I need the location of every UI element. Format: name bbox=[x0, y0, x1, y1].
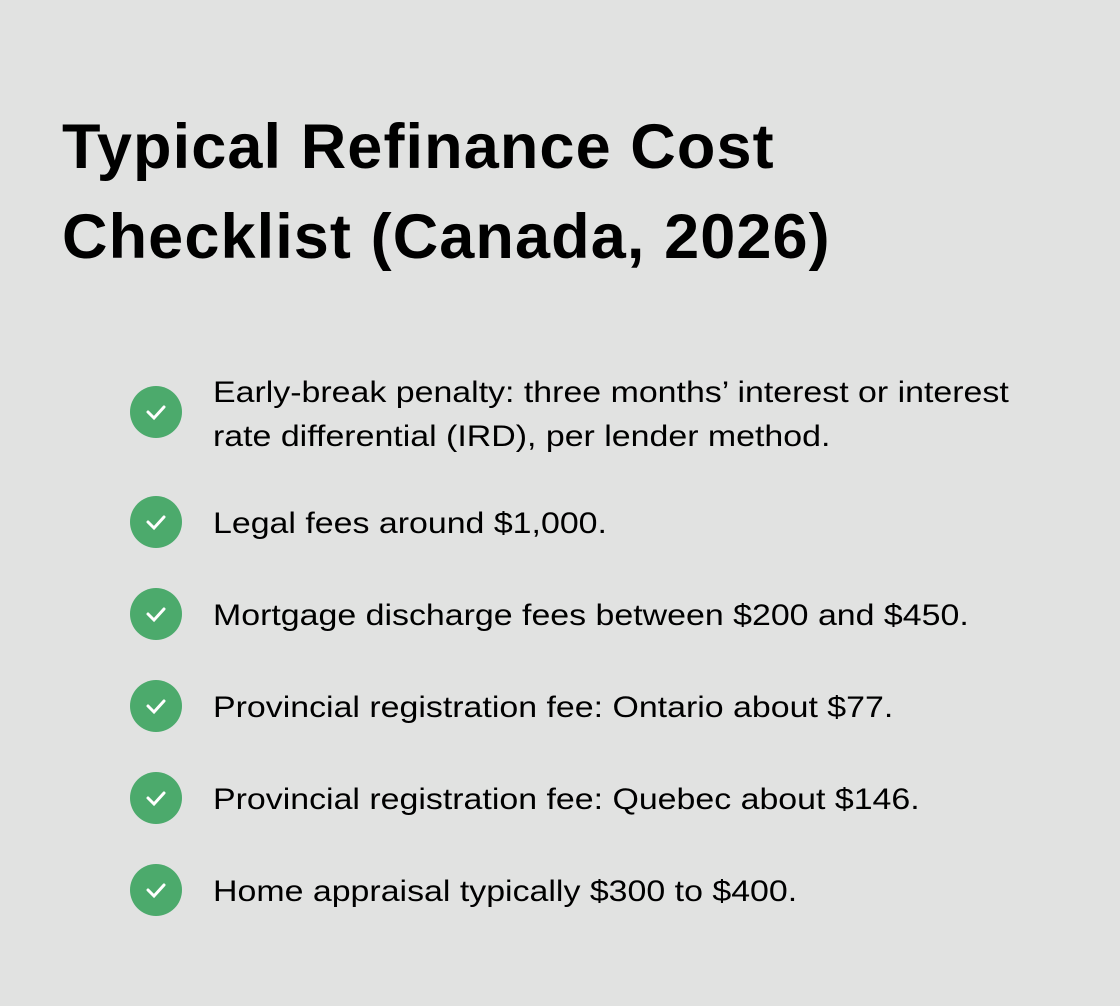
item 1: rate differential (IRD), per lender method. bbox=[213, 420, 830, 453]
item 1 bbox=[130, 376, 1009, 453]
title bbox=[62, 112, 831, 272]
item 2: Legal fees around $1,000. bbox=[213, 507, 607, 540]
item 6: Home appraisal typically $300 to $400. bbox=[213, 875, 797, 908]
item 4 bbox=[130, 680, 893, 732]
item 4: Provincial registration fee: Ontario about $77. bbox=[213, 691, 893, 724]
item 2 bbox=[130, 496, 607, 548]
item 3: Mortgage discharge fees between $200 and $450. bbox=[213, 599, 969, 632]
title: Typical Refinance Cost bbox=[62, 112, 775, 182]
item 1: Early-break penalty: three months’ interest or interest bbox=[213, 376, 1009, 409]
item 5: Provincial registration fee: Quebec about $146. bbox=[213, 783, 920, 816]
title: Checklist (Canada, 2026) bbox=[62, 202, 831, 272]
item 6 bbox=[130, 864, 797, 916]
item 5 bbox=[130, 772, 920, 824]
item 3 bbox=[130, 588, 969, 640]
